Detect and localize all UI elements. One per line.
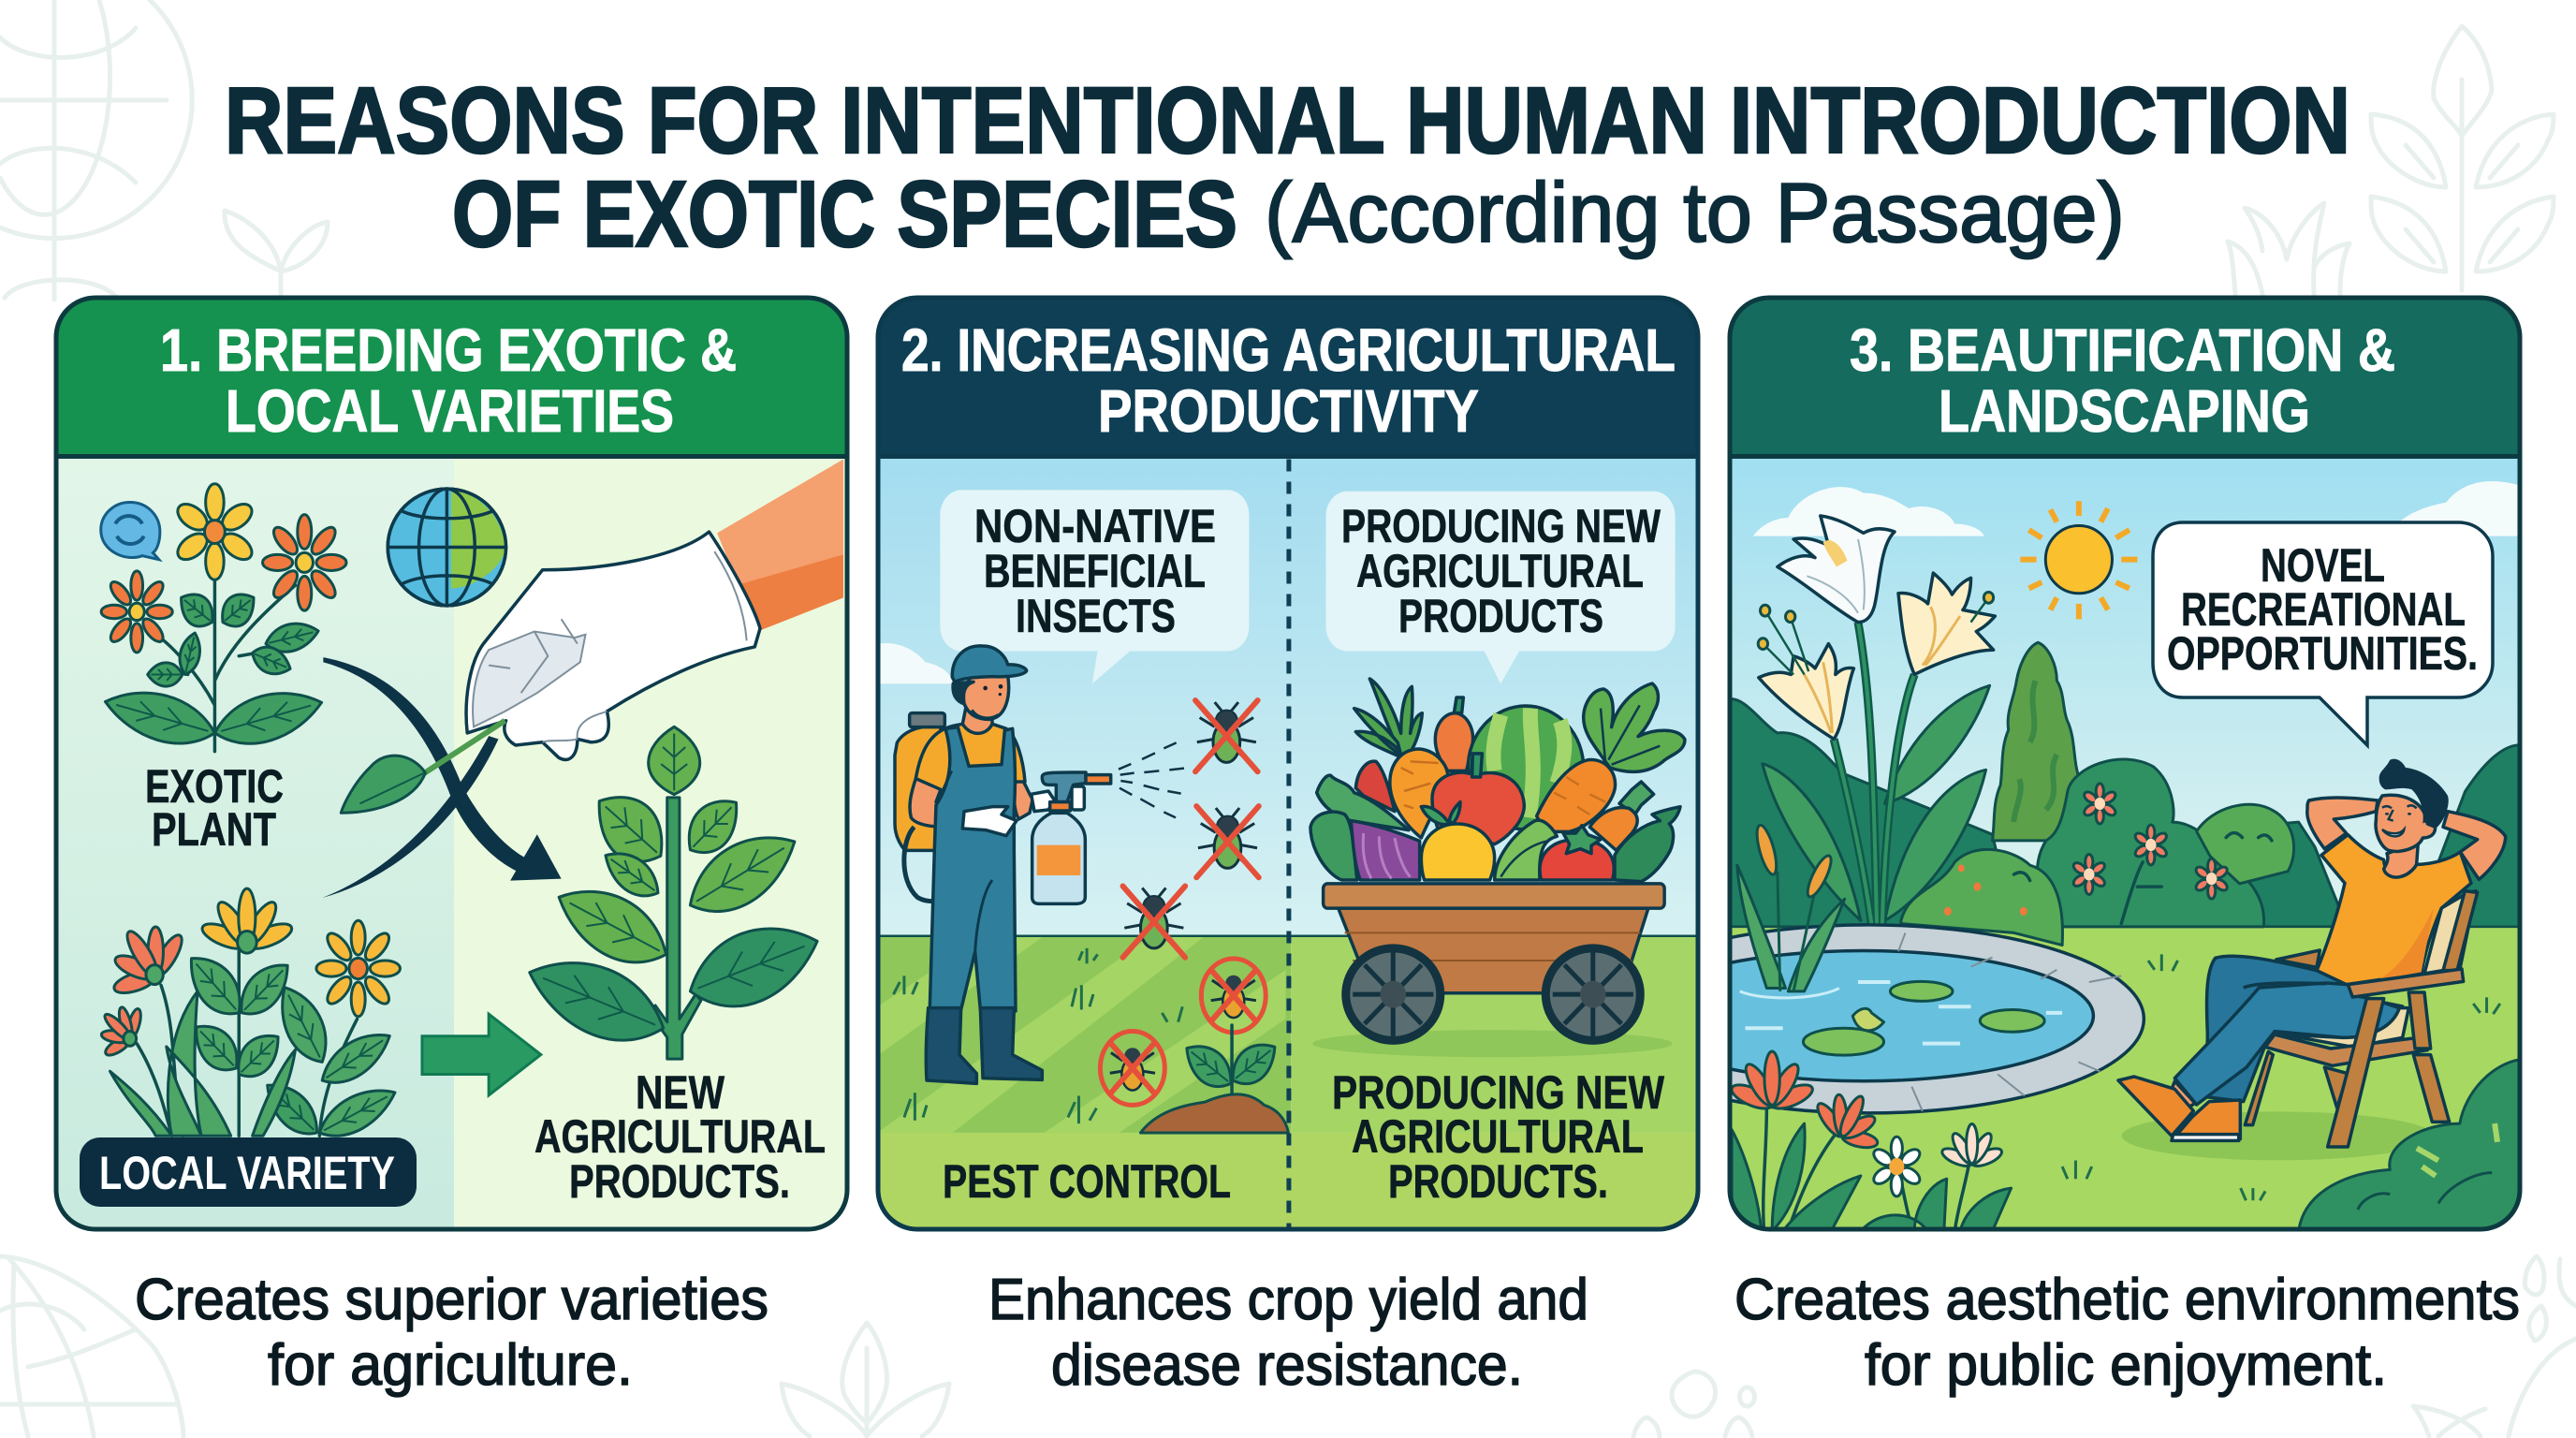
callout: novel recreational opportunities: RECREATIONAL [2181,583,2466,636]
caption: panel 3 [1734,1268,2520,1398]
panel 2 header band [878,298,1698,456]
icon: foreground flowers [1729,1051,2012,1231]
callout: non-native beneficial insects [940,490,1249,683]
cross-breeding arrows [322,657,562,898]
title: (According to Passage) [1265,167,2125,260]
icon: globe [388,489,506,606]
icon: cypress tree [1992,642,2084,841]
panel 1 illustration [88,460,843,1148]
icon: farmer with sprayer [895,646,1184,1083]
panel 1 border [56,298,847,1229]
icon: wooden cart [1312,884,1673,1057]
icon: gloved hand holding cutting [341,460,843,813]
callout: producing new agricultural products [1326,492,1676,683]
label: exotic plant: EXOTIC [145,760,284,813]
label: non-native beneficial insects: BENEFICIAL [984,545,1206,597]
caption: panel 3: for public enjoyment. [1865,1333,2387,1398]
panel 3 foreground [2062,954,2525,1231]
label: new agricultural products: PRODUCTS. [569,1155,790,1208]
panel 2 heading [901,316,1676,445]
field background [877,936,1699,1231]
panel 1 heading [160,316,737,445]
icon: sun [2020,501,2137,619]
callout: novel recreational opportunities [2153,522,2493,745]
callout: novel recreational opportunities: OPPORTUNITIES. [2167,627,2478,680]
local variety plants [88,888,402,1148]
label: producing new agricultural products, top: PRODUCING NEW [1341,500,1661,552]
panel 3 heading: 3. BEAUTIFICATION & [1850,316,2395,384]
title: OF EXOTIC SPECIES [452,162,1237,267]
panel: beautification and landscaping [1728,296,2522,1232]
label: new agricultural products: NEW [636,1066,725,1119]
foreground bush [2299,1059,2525,1231]
label: producing new agricultural products, top: AGRICULTURAL [1356,545,1644,597]
title [225,68,2350,267]
panel 3 header band [1730,298,2520,456]
dashed divider [1286,460,1291,1231]
panel 2 cart and divider [1289,460,1673,1231]
grass tufts [2062,954,2500,1200]
panel 1 heading: 1. BREEDING EXOTIC & [160,316,737,384]
lawn [1728,927,2524,1234]
label: producing new agricultural products, bottom: PRODUCING NEW [1332,1066,1665,1119]
panel 2 heading: PRODUCTIVITY [1098,377,1479,445]
label: producing new agricultural products, bottom: PRODUCTS. [1388,1155,1608,1208]
caption: panel 2: Enhances crop yield and [988,1268,1588,1332]
icon: vegetables [1310,679,1685,882]
label: non-native beneficial insects: NON-NATIVE [974,500,1216,552]
panel: breeding exotic and local varieties [56,298,847,1229]
panel 3 border [1730,298,2520,1229]
caption: panel 1: Creates superior varieties [135,1268,768,1332]
icon: cattails [1737,823,1845,998]
label: new agricultural products: AGRICULTURAL [534,1110,826,1163]
icon: pond [1732,923,2145,1115]
label: non-native beneficial insects [974,500,1216,642]
new hybrid plant [520,726,827,1060]
panel 2 heading: 2. INCREASING AGRICULTURAL [901,316,1676,384]
panel 2 border [878,298,1698,1229]
label: new agricultural products [534,1066,826,1208]
callout: novel recreational opportunities: NOVEL [2261,539,2385,592]
label: non-native beneficial insects: INSECTS [1016,590,1176,642]
panel 3 heading [1850,316,2395,445]
flowering bushes [1901,759,2294,946]
panel 1 heading: LOCAL VARIETIES [226,377,674,445]
caption: panel 2 [988,1268,1588,1398]
clouds [1753,481,2525,536]
panel 3 heading: LANDSCAPING [1939,377,2310,445]
label: producing new agricultural products, top: PRODUCTS [1398,590,1603,642]
label: exotic plant: PLANT [152,803,276,856]
icon: seedling in soil [1140,1025,1288,1133]
caption: panel 3: Creates aesthetic environments [1734,1268,2520,1332]
exotic plant [100,484,346,755]
label: producing new agricultural products, top [1341,500,1661,642]
icon: crossed pests [1100,700,1266,1105]
background trees [1728,699,2525,932]
label: local variety pill [80,1137,417,1207]
panel: increasing agricultural productivity [877,298,1699,1231]
panel 2 scene background [877,456,1699,1231]
icon: speech bubble with cycle arrows [101,503,160,560]
icon: lily plant [1758,516,1995,924]
caption: panel 1 [135,1268,768,1398]
arrow: local variety to new plant [422,1014,541,1095]
label: exotic plant [145,760,284,856]
label: pest control: PEST CONTROL [943,1155,1231,1208]
caption: panel 1: for agriculture. [268,1333,633,1398]
caption: panel 2: disease resistance. [1051,1333,1523,1398]
label: local variety pill: LOCAL VARIETY [99,1147,395,1199]
icon: relaxing man in chair [2118,759,2506,1160]
cloud [877,643,953,683]
panel 1 header band [56,298,847,456]
panel 3 scene background [1732,459,2518,1226]
label: producing new agricultural products, bottom: AGRICULTURAL [1352,1110,1644,1163]
label: producing new agricultural products, bottom [1332,1066,1665,1208]
